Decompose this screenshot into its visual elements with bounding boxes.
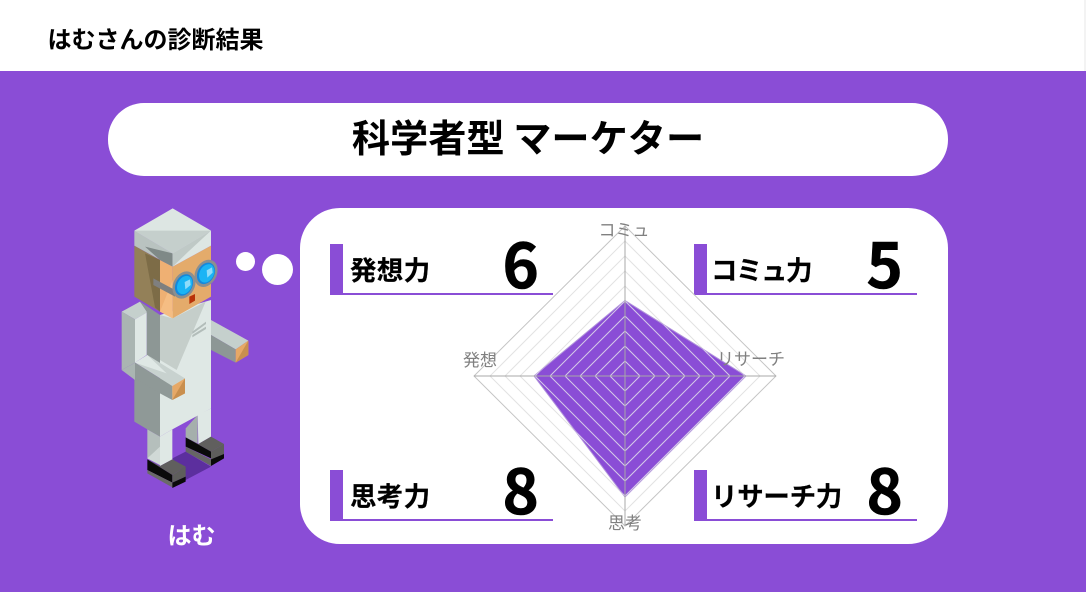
results panel [300, 208, 948, 544]
score: リサーチ力: 8 [866, 442, 903, 532]
score: 発想力: 発想力 [350, 249, 430, 288]
score: コミュ力 [694, 244, 917, 295]
axis label right: リサーチ [717, 345, 785, 370]
axis label bottom: 思考 [608, 509, 642, 534]
axis label top: コミュ [598, 216, 650, 241]
left leg and shoe [147, 429, 186, 488]
score: 思考力: 8 [502, 442, 539, 532]
page heading: はむさんの診断結果 [48, 20, 264, 55]
coat body [134, 300, 211, 437]
score: コミュ力: 5 [866, 216, 903, 306]
score: 発想力 [330, 244, 553, 295]
score: コミュ力: コミュ力 [711, 249, 811, 288]
thought bubble small [236, 252, 255, 271]
front arm [122, 302, 185, 400]
mouth [189, 294, 195, 304]
title pill [108, 103, 948, 176]
score: リサーチ力 [694, 470, 917, 521]
character name: はむ [168, 516, 216, 551]
score: リサーチ力: リサーチ力 [711, 475, 842, 514]
score: 発想力: 6 [502, 216, 539, 306]
score: 思考力 [330, 470, 553, 521]
head [134, 208, 211, 318]
thought bubble large [262, 254, 293, 285]
scrollbar edge [1084, 0, 1086, 71]
radar chart [463, 216, 785, 534]
goggles [153, 256, 222, 303]
axis label left: 発想 [463, 346, 497, 371]
character illustration [122, 208, 248, 488]
score: 思考力: 思考力 [350, 475, 430, 514]
shadow [172, 452, 211, 480]
title text: 科学者型 マーケター [352, 109, 704, 164]
data polygon [534, 300, 746, 497]
right leg and shoe [186, 408, 224, 466]
back arm [211, 320, 248, 363]
